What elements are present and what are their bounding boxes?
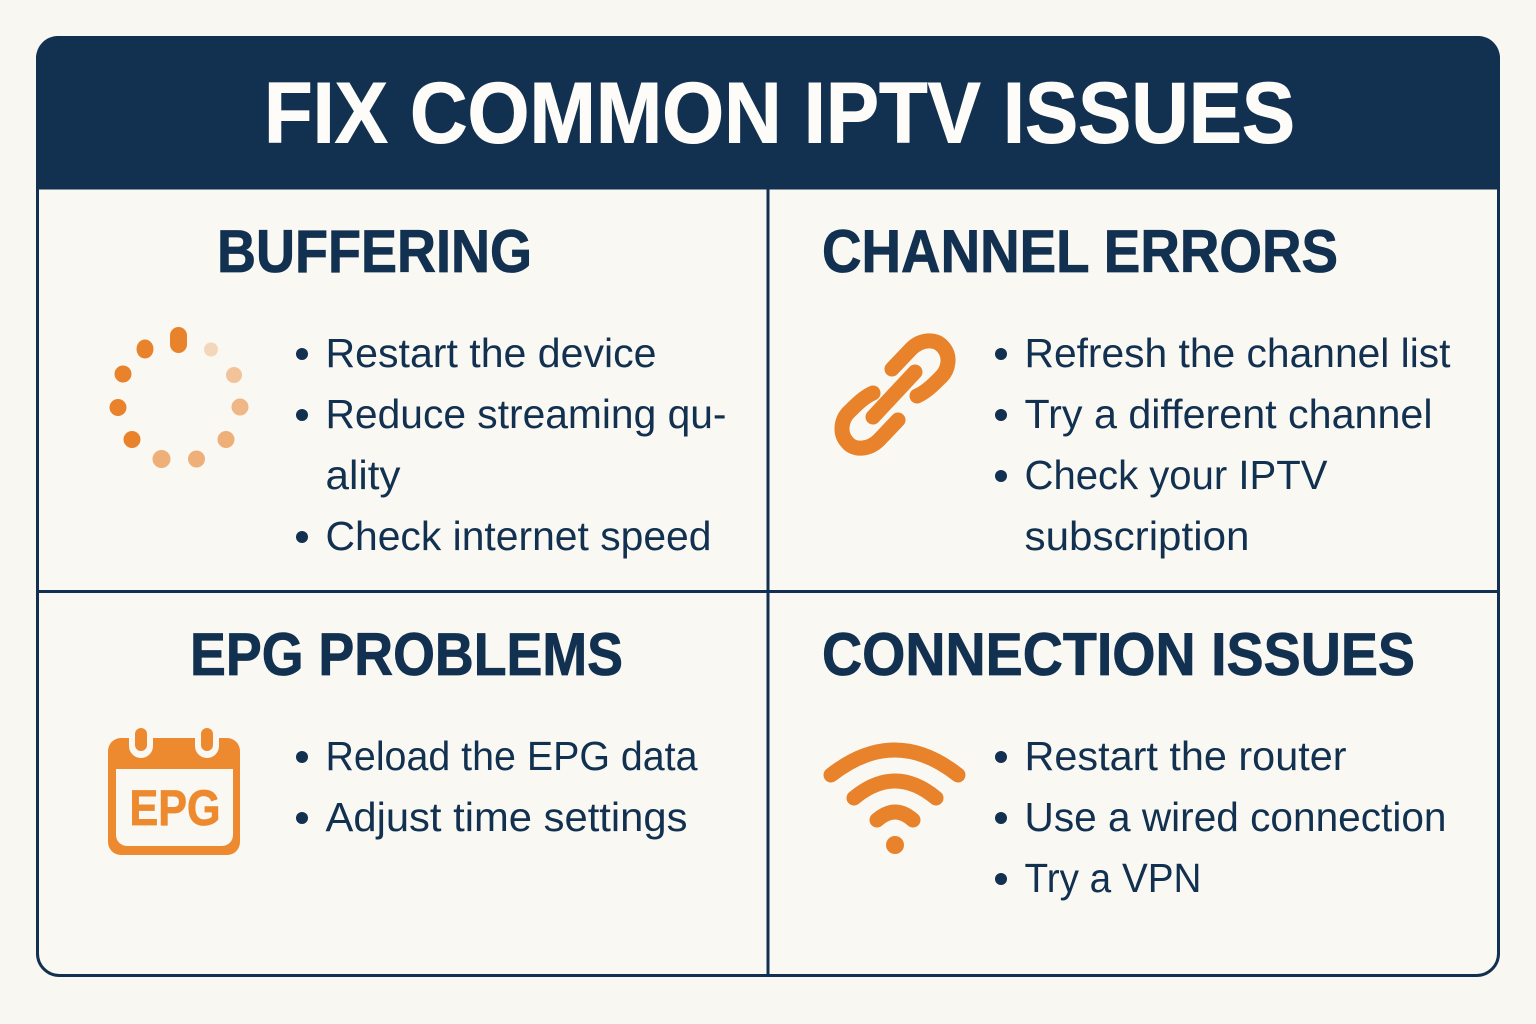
icon: epg calendar: EPG — [130, 780, 220, 836]
heading: buffering: BUFFERING — [217, 218, 532, 285]
panel: connection issues — [822, 621, 1446, 901]
bullet list: epg problems: Adjust time settings — [326, 794, 688, 840]
icon: chain link — [842, 341, 948, 448]
title banner — [36, 36, 1500, 190]
bullet list: buffering: Restart the device — [326, 330, 656, 376]
bullet list: buffering: Check internet speed — [326, 513, 712, 559]
icon: loading spinner — [110, 327, 248, 468]
bullet list: channel errors: Check your IPTV — [1024, 452, 1328, 498]
bullet list: buffering: Reduce streaming qu- — [326, 391, 726, 437]
bullet list: channel errors: Try a different channel — [1024, 391, 1432, 437]
bullet list: connection issues: Use a wired connection — [1024, 794, 1446, 840]
icon: wifi signal — [831, 750, 958, 854]
bullet list: channel errors: Refresh the channel list — [1024, 330, 1451, 376]
bullet list: channel errors — [995, 330, 1451, 559]
bullet list: connection issues — [995, 733, 1446, 901]
panel: channel errors — [822, 218, 1451, 559]
bullet list: epg problems: Reload the EPG data — [326, 733, 698, 779]
bullet list: epg problems — [296, 733, 698, 840]
heading: connection issues: CONNECTION ISSUES — [822, 621, 1415, 688]
icon: epg calendar — [108, 728, 240, 855]
panel: epg problems — [108, 621, 698, 855]
bullet list: buffering — [296, 330, 726, 559]
heading: epg problems: EPG PROBLEMS — [190, 621, 623, 688]
bullet list: buffering: ality — [326, 452, 401, 498]
bullet list: connection issues: Try a VPN — [1024, 855, 1202, 901]
title: FIX COMMON IPTV ISSUES — [264, 66, 1295, 162]
panel: buffering — [110, 218, 726, 559]
heading: channel errors: CHANNEL ERRORS — [822, 218, 1338, 285]
bullet list: connection issues: Restart the router — [1024, 733, 1346, 779]
bullet list: channel errors: subscription — [1024, 513, 1250, 559]
